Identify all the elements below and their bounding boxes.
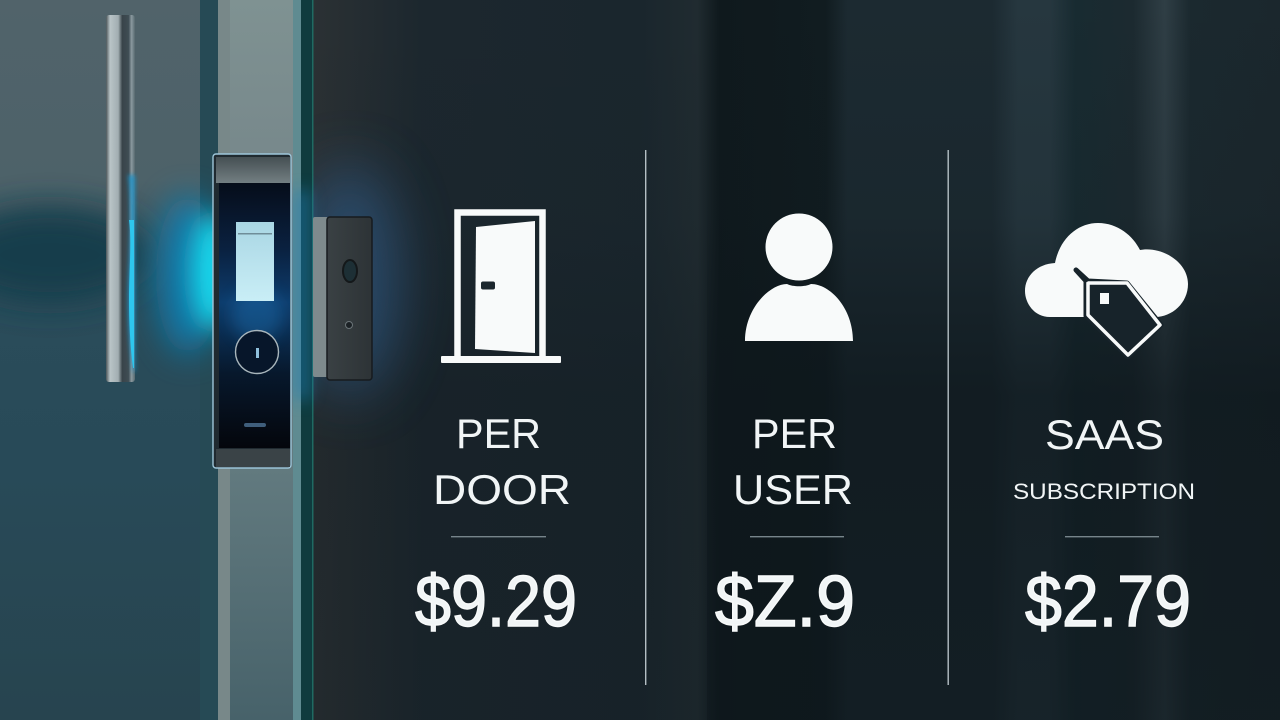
- heading: per door: PER: [456, 410, 541, 457]
- heading: per user: USER: [733, 466, 853, 513]
- door handle: [106, 15, 135, 382]
- blue glow: [156, 165, 400, 400]
- icon: door: [441, 212, 561, 363]
- column: saas subscription: [1013, 223, 1195, 642]
- heading: saas subscription: SAAS: [1045, 411, 1164, 458]
- price: per user: $Z.9: [715, 562, 855, 642]
- divider lines: [645, 150, 949, 685]
- icon: user: [745, 214, 853, 341]
- price: per door: $9.29: [415, 562, 577, 642]
- lock screen: [236, 222, 274, 301]
- door glass panel: [0, 0, 314, 720]
- heading: saas subscription: [1013, 411, 1195, 504]
- column: per door: [415, 212, 577, 642]
- side latch box: [313, 217, 372, 380]
- heading: per door: [433, 410, 571, 513]
- column: per user: [715, 214, 855, 642]
- heading: per user: PER: [752, 410, 837, 457]
- fingerprint button: [236, 330, 278, 374]
- heading: saas subscription: SUBSCRIPTION: [1013, 479, 1195, 504]
- price: saas subscription: $2.79: [1025, 562, 1191, 642]
- heading: per user: [733, 410, 853, 513]
- icon: cloud with price tag: [1025, 223, 1188, 357]
- photo: smart door lock on glass door: [0, 0, 400, 720]
- lock keypad unit: [213, 154, 291, 468]
- heading: per door: DOOR: [433, 466, 571, 513]
